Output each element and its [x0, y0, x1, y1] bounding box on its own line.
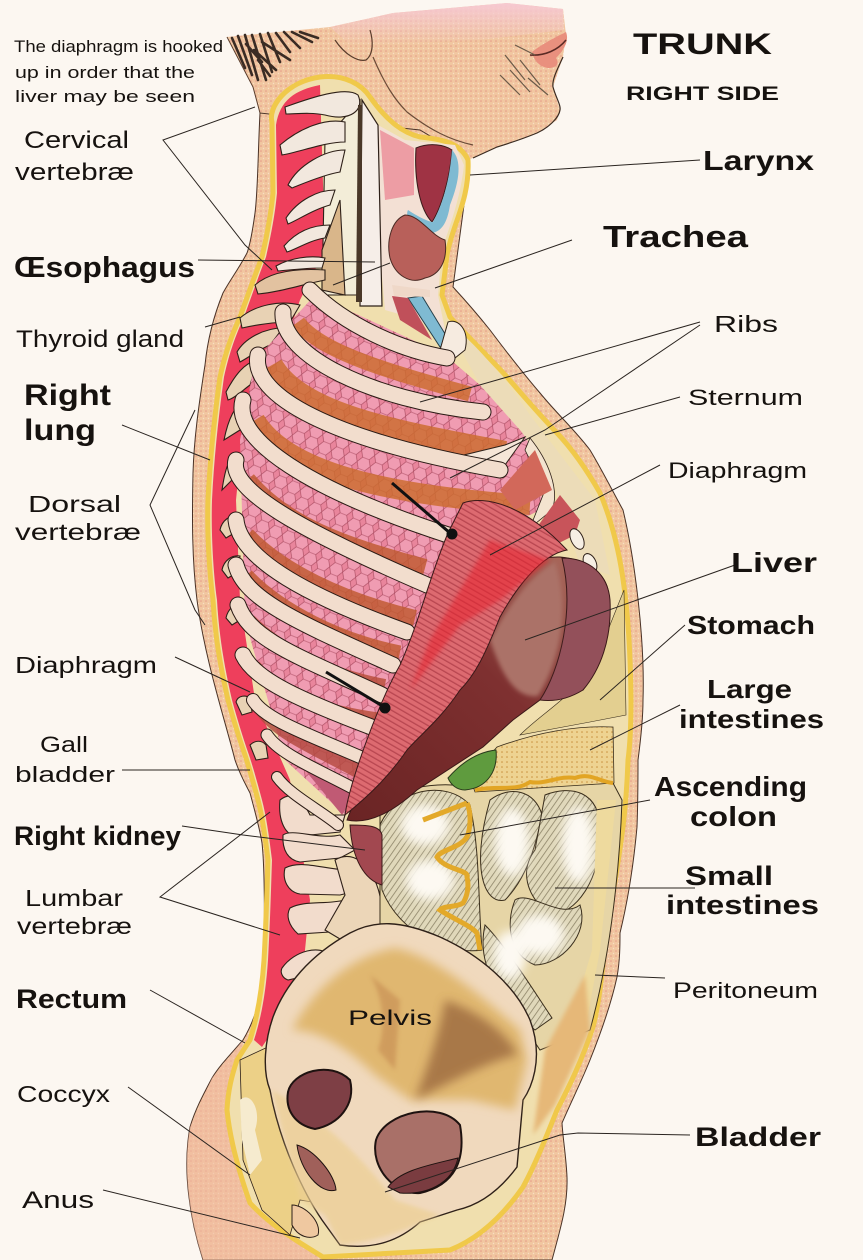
label: liver: Liver	[731, 547, 817, 578]
label: dorsal vertebrae: vertebræ	[15, 519, 141, 545]
thyroid gland	[389, 215, 446, 280]
title: trunk: TRUNK	[633, 28, 772, 61]
label: cervical vertebrae: Cervical	[24, 127, 129, 154]
intestines	[380, 783, 622, 1050]
leader lines	[103, 107, 735, 1238]
rib cage	[235, 290, 500, 825]
body cavity with yellow fat border	[208, 77, 631, 1257]
label: small intestines: Small	[685, 861, 773, 891]
larynx muscle	[416, 145, 452, 222]
label: lumbar vertebrae: Lumbar	[25, 885, 123, 911]
spine red band	[212, 85, 325, 1047]
peritoneum pale strip	[570, 800, 616, 1030]
sternum and costal cartilage	[435, 321, 610, 575]
label: cervical vertebrae: vertebræ	[15, 159, 134, 186]
diaphragm flap	[345, 500, 567, 815]
right lung	[240, 295, 545, 815]
label: small intestines: intestines	[666, 890, 819, 920]
label: thyroid gland: Thyroid gland	[16, 326, 184, 353]
pins holding the diaphragm	[326, 483, 456, 712]
subtitle: right side: RIGHT SIDE	[626, 84, 779, 105]
dorsal vertebrae	[220, 303, 300, 760]
label: ascending colon: colon	[690, 801, 777, 832]
bottom skin tone	[187, 1040, 320, 1260]
right kidney	[350, 825, 382, 885]
label: right lung: lung	[24, 414, 96, 447]
neck structures	[356, 100, 464, 347]
label: oesophagus: Œsophagus	[14, 252, 195, 284]
trachea tube	[408, 296, 450, 347]
lips	[532, 32, 567, 68]
note: diaphragm hooked	[14, 37, 223, 106]
liver	[347, 557, 610, 821]
coccyx and pelvic floor	[240, 1045, 330, 1237]
label: stomach: Stomach	[687, 610, 815, 640]
label: cervical vertebrae	[15, 127, 134, 186]
gall bladder	[448, 750, 496, 790]
label: sternum: Sternum	[688, 385, 803, 410]
label: ascending colon: Ascending	[654, 771, 807, 802]
body skin layer	[187, 113, 643, 1260]
label: larynx: Larynx	[703, 145, 815, 176]
pelvis	[265, 924, 536, 1246]
stubble	[500, 45, 548, 95]
label: gall bladder: bladder	[15, 762, 115, 787]
lower right fat tissue	[533, 975, 590, 1135]
label: peritoneum: Peritoneum	[673, 978, 818, 1003]
stomach and large intestine band	[470, 590, 626, 792]
label: large intestines: intestines	[679, 704, 824, 734]
obturator openings	[287, 1070, 351, 1129]
label: diaphragm right: Diaphragm	[668, 458, 807, 483]
label: right kidney: Right kidney	[14, 821, 181, 851]
head and chin	[227, 3, 567, 170]
pelvis label: Pelvis	[348, 1007, 432, 1030]
note: diaphragm hooked: up in order that the	[15, 63, 195, 82]
lumbar vertebrae	[280, 796, 382, 980]
label: large intestines: Large	[707, 674, 792, 704]
label: anus: Anus	[22, 1187, 94, 1214]
label: lumbar vertebrae	[17, 885, 132, 939]
small intestines coils	[380, 790, 600, 1030]
label: right lung	[24, 379, 111, 447]
hair	[232, 32, 318, 80]
label: gall bladder	[15, 732, 115, 787]
cervical vertebrae	[255, 92, 362, 295]
note: diaphragm hooked: liver may be seen	[15, 87, 195, 106]
label: trachea: Trachea	[603, 219, 749, 254]
label: bladder: Bladder	[695, 1122, 822, 1152]
ascending colon band	[423, 803, 480, 950]
label: dorsal vertebrae: Dorsal	[28, 491, 121, 517]
vertebrae column	[220, 92, 382, 980]
label: coccyx: Coccyx	[17, 1081, 111, 1107]
larynx cartilage blue	[407, 150, 459, 233]
label: lumbar vertebrae: vertebræ	[17, 913, 132, 939]
label: ascending colon	[654, 771, 807, 832]
label: diaphragm left: Diaphragm	[15, 652, 157, 678]
label: right lung: Right	[24, 379, 111, 412]
note: diaphragm hooked: The diaphragm is hooked	[14, 37, 223, 56]
label: rectum: Rectum	[16, 984, 127, 1014]
label: dorsal vertebrae	[15, 491, 141, 545]
label: gall bladder: Gall	[40, 732, 88, 757]
label: large intestines	[679, 674, 824, 734]
label: ribs: Ribs	[714, 311, 778, 337]
label: small intestines	[666, 861, 819, 920]
